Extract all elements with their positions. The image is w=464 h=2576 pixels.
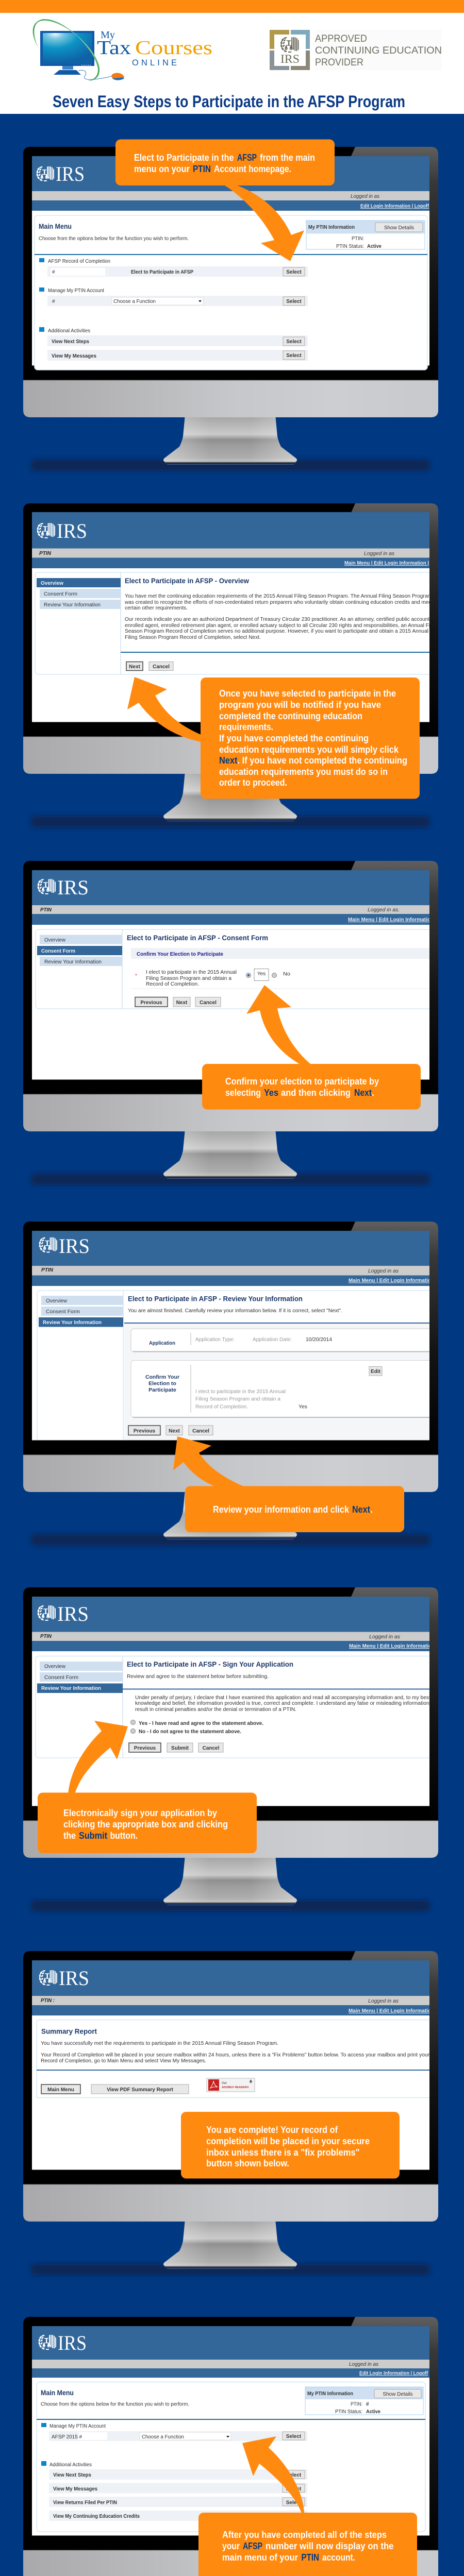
side navigation: Review Your Information	[43, 1320, 102, 1326]
form buttons: Cancel	[153, 664, 170, 670]
callout 1: Elect to Participate in the	[134, 152, 234, 163]
PTIN information box: Show Details	[384, 225, 414, 231]
callout 6: completion will be placed in your secure	[206, 2136, 370, 2146]
callout 3: Yes	[264, 1088, 278, 1098]
agreement options: No - I do not agree to the statement above.	[139, 1729, 241, 1735]
side navigation: Consent Form	[41, 948, 75, 954]
logo wordmark: ONLINE	[132, 58, 177, 67]
screen content	[32, 1960, 434, 2098]
callout 3: .	[372, 1088, 374, 1098]
logo: IRS approved continuing education provider	[270, 30, 442, 70]
IRS header bar	[32, 156, 429, 211]
IRS logo	[37, 879, 88, 894]
logged in: Logged in as	[349, 2361, 379, 2367]
logged in: Logged in as	[351, 193, 380, 199]
confirm election form: No	[283, 972, 290, 977]
manage PTIN section: Choose a Function	[113, 299, 156, 304]
page heading: Elect to Participate in AFSP - Overview	[125, 577, 249, 585]
form buttons	[128, 1426, 213, 1435]
arrow: callout to next button	[127, 677, 204, 742]
IRS logo	[36, 166, 84, 181]
IRS logo	[37, 1602, 89, 1625]
PTIN information box: Active	[367, 244, 382, 249]
callout 7: main menu of your	[222, 2552, 298, 2563]
arrow: callout to next button	[173, 1436, 247, 1488]
callout 7: number will now display on the	[266, 2541, 394, 2551]
callout 3: and then clicking	[281, 1088, 351, 1098]
callout 2: Once you have selected to participate in the	[219, 688, 396, 699]
account links: Edit Login Information | Logoff	[359, 2371, 428, 2376]
panel divider	[122, 1656, 123, 1758]
callout 4: .	[370, 1504, 373, 1515]
callout 2: If you have completed the continuing	[219, 733, 369, 743]
side navigation: Consent Form	[46, 1309, 80, 1315]
confirm election form: Yes	[257, 971, 266, 977]
perjury statement: Under penalty of perjury, I declare that I have examined this application and read all accompanying information and, to my best	[135, 1695, 430, 1701]
side navigation: Review Your Information	[44, 959, 102, 965]
perjury statement: result in criminal penalties and/or the denial or termination of a PTIN.	[135, 1707, 296, 1713]
confirm election card: Confirm Your	[145, 1374, 179, 1380]
IRS logo: IRS	[57, 1602, 89, 1625]
callout 2: order to proceed.	[219, 777, 287, 788]
logo: My Tax Courses Online	[33, 19, 212, 81]
callout 7: PTIN	[301, 2552, 319, 2563]
main panel	[36, 929, 448, 1009]
PTIN information box: Show Details	[383, 2392, 413, 2397]
callout 3: selecting	[225, 1088, 261, 1098]
instruction text: You are almost finished. Carefully review your information below. If it is correct, select "Next".	[128, 1308, 342, 1314]
manage PTIN section: Manage My PTIN Account	[48, 288, 104, 294]
logo monitor icon	[40, 31, 94, 75]
additional activities section: View My Continuing Education Credits	[53, 2514, 140, 2519]
arrow: callout to select	[223, 184, 304, 261]
main menu description: Choose from the options below for the function you wish to perform.	[39, 236, 189, 242]
perjury statement	[135, 1695, 441, 1713]
callout 2: . If you have not completed the continuing	[237, 755, 407, 766]
divider line	[123, 1689, 429, 1690]
form buttons: Previous	[140, 1000, 162, 1006]
divider line	[37, 2070, 429, 2071]
main panel	[35, 572, 448, 674]
orange top bar	[0, 0, 464, 13]
main menu heading: Main Menu	[41, 2388, 74, 2397]
callout 5: button.	[110, 1831, 138, 1841]
arrow: callout to yes option	[246, 985, 312, 1065]
screen content	[32, 870, 448, 1009]
logo mouse	[111, 73, 124, 80]
summary text	[41, 2041, 430, 2064]
callout 3: Confirm your election to participate by	[225, 1076, 379, 1087]
form buttons: Main Menu	[47, 2087, 74, 2093]
confirm election form: *	[135, 973, 137, 979]
form buttons: Next	[176, 1000, 188, 1006]
confirm election card: Participate	[148, 1387, 176, 1393]
side navigation: Consent Form	[44, 1675, 78, 1681]
PTIN information box: PTIN Status:	[336, 244, 364, 249]
form buttons: Cancel	[192, 1428, 209, 1434]
callout 7: AFSP	[243, 2541, 262, 2551]
panel divider	[122, 929, 123, 1009]
page heading: Elect to Participate in AFSP - Consent Form	[127, 934, 268, 942]
callout 2: requirements.	[219, 722, 273, 732]
confirm election card: Record of Completion.	[195, 1404, 248, 1410]
PTIN label: PTIN	[39, 550, 51, 556]
overview paragraph 1	[124, 594, 433, 611]
arrow: callout to agreement options	[68, 1721, 128, 1794]
summary text: Record of Completion, go to Main Menu and select View My Messages.	[41, 2058, 206, 2064]
main panel	[36, 1656, 448, 1758]
callout 1: PTIN	[193, 164, 211, 174]
account links: Main Menu | Edit Login Information |	[344, 561, 429, 566]
main panel	[35, 215, 427, 370]
overview paragraph 2: enrolled agent, enrolled retirement plan agent, or enrolled actuary subject to all Circular 230 rights and responsibilities, an Annual Filing	[125, 623, 438, 629]
logged in: Logged in as.	[368, 907, 400, 913]
overview paragraph 2: Season Program Record of Completion serves no additional purpose. However, if you want to participate and obtain a 2015 Annual	[125, 629, 428, 634]
summary text: Your Record of Completion will be placed in your secure mailbox within 24 hours, unless there is a "Fix Problems" button below. To access your mailbox and print your	[41, 2053, 430, 2058]
form buttons	[135, 997, 221, 1007]
callout 2: education requirements you will simply click	[219, 744, 399, 755]
AFSP record section: #	[52, 269, 55, 275]
provider text: CONTINUING EDUCATION	[315, 45, 442, 56]
IRS logo	[39, 1234, 90, 1258]
callout 5: clicking the appropriate box and clicking	[63, 1819, 228, 1829]
manage PTIN section: #	[52, 299, 55, 304]
step 6 monitor: summary report	[23, 1951, 438, 2275]
PTIN information box: PTIN:	[351, 2402, 362, 2407]
summary heading: Summary Report	[41, 2027, 97, 2035]
PTIN information box	[306, 221, 425, 249]
confirm election card: I elect to participate in the 2015 Annual	[195, 1389, 286, 1395]
monitor frame	[23, 147, 438, 471]
callout 5: Electronically sign your application by	[63, 1808, 217, 1818]
callout 5: Submit	[79, 1831, 107, 1841]
callout 5: the	[63, 1831, 76, 1841]
account links: Main Menu | Edit Login Information	[349, 1643, 435, 1649]
form buttons	[129, 1743, 223, 1752]
screen content	[32, 512, 448, 674]
callout 7: account.	[322, 2552, 355, 2563]
PTIN label: PTIN	[40, 1633, 52, 1639]
callout 2	[201, 677, 420, 799]
manage PTIN section: AFSP 2015 #	[52, 2434, 82, 2440]
form buttons: Next	[169, 1428, 180, 1434]
IRS logo: IRS	[59, 1234, 90, 1258]
overview paragraph 2: Our records indicate you are an authorized Department of Treasury Circular 230 practitioner. As an attorney, certified public accountant,	[125, 617, 438, 622]
confirm election card: Filing Season Program and obtain a	[195, 1396, 280, 1402]
screen content	[32, 1231, 440, 1440]
monitor frame	[23, 2317, 438, 2576]
form buttons: View PDF Summary Report	[107, 2087, 174, 2093]
Get Adobe Reader badge: ADOBE® READER®	[222, 2086, 249, 2089]
manage PTIN section	[41, 2423, 307, 2441]
IRS logo	[39, 1967, 89, 1990]
application card: Application	[149, 1340, 175, 1346]
additional activities section: Select	[286, 2500, 302, 2506]
application card: Application Type:	[195, 1337, 235, 1343]
confirm election form	[131, 948, 429, 989]
PTIN label: PTIN	[40, 907, 52, 913]
confirm election form: Record of Completion.	[146, 981, 199, 987]
overview paragraph 1: certain other requirements.	[125, 605, 188, 611]
main panel	[37, 2382, 425, 2532]
side navigation: Overview	[41, 581, 63, 586]
confirm election form: I elect to participate in the 2015 Annual	[146, 970, 237, 975]
logo wordmark: Courses	[135, 37, 212, 59]
step 7 monitor: main menu with AFSP number	[23, 2317, 438, 2576]
callout 2: education requirements you must do so in	[219, 767, 388, 777]
title: Seven Easy Steps to Participate in the AFSP Program	[53, 92, 405, 111]
confirm election card	[131, 1360, 440, 1418]
side navigation	[37, 935, 122, 966]
step 2 monitor: overview	[23, 503, 448, 827]
main panel outline	[37, 1291, 433, 1440]
form buttons: Next	[129, 664, 141, 670]
IRS header bar	[32, 1597, 429, 1651]
additional activities section: View Returns Filed Per PTIN	[53, 2500, 117, 2506]
IRS square frame	[270, 30, 310, 70]
IRS wordmark: IRS	[280, 53, 300, 65]
monitor frame	[23, 1951, 438, 2275]
form buttons	[126, 662, 173, 671]
side navigation: Overview	[44, 938, 66, 943]
logged in: Logged in as	[368, 1268, 399, 1274]
callout 3: Next	[354, 1088, 372, 1098]
confirm election card: Yes	[299, 1404, 307, 1410]
callout 1: menu on your	[134, 164, 190, 174]
application card: 10/20/2014	[306, 1337, 332, 1343]
PTIN label: PTIN	[41, 1267, 53, 1273]
IRS header bar	[32, 2326, 429, 2378]
callout 7: your	[222, 2541, 240, 2551]
callout 6: You are complete! Your record of	[206, 2125, 338, 2135]
logo cable	[78, 70, 112, 79]
side navigation: Consent Form	[44, 591, 77, 597]
monitor frame	[23, 503, 438, 827]
callout 2: program you will be notified if you have	[219, 700, 381, 710]
additional activities section: Select	[286, 2486, 302, 2492]
main menu description: Choose from the options below for the function you wish to perform.	[41, 2402, 189, 2407]
main menu heading: Main Menu	[39, 222, 72, 230]
form buttons: Previous	[134, 1428, 156, 1434]
additional activities section	[41, 2461, 307, 2521]
callout 1: AFSP	[237, 152, 257, 163]
callout 4	[185, 1486, 404, 1532]
side navigation	[37, 578, 121, 609]
confirm election form: Confirm Your Election to Participate	[137, 951, 223, 957]
screen content	[32, 156, 429, 370]
white header band	[0, 0, 464, 114]
divider line	[35, 254, 427, 255]
overview paragraph 2: Filing Season Program Record of Completion, select Next.	[125, 635, 261, 640]
monitor frame	[23, 1222, 438, 1546]
IRS header bar	[32, 870, 429, 925]
overview paragraph 2	[125, 617, 438, 640]
callout 1: from the main	[260, 152, 315, 163]
panel divider	[120, 572, 121, 674]
callout 3	[202, 1064, 421, 1110]
side navigation: Review Your Information	[44, 602, 101, 608]
application card: Application Date:	[253, 1337, 292, 1343]
IRS logo	[37, 522, 86, 538]
provider text	[315, 33, 442, 68]
manage PTIN section: Choose a Function	[142, 2434, 184, 2440]
PTIN information box	[305, 2387, 423, 2415]
PTIN information box: My PTIN Information	[307, 2391, 353, 2397]
form buttons: Cancel	[203, 1745, 220, 1751]
step 1 monitor: main menu	[23, 147, 438, 471]
additional activities section: Select	[286, 339, 302, 345]
callout 2: Next	[219, 755, 238, 766]
PTIN information box: Active	[366, 2409, 380, 2415]
callout 4: Next	[352, 1504, 370, 1515]
PTIN label: PTIN :	[41, 1997, 55, 2004]
additional activities section: Additional Activities	[49, 2462, 92, 2468]
additional activities section: Select	[286, 353, 302, 359]
perjury statement: knowledge and belief, the information provided is true, correct and complete. I understand any false or misleading information may	[135, 1701, 441, 1706]
side navigation: Review Your Information	[41, 1686, 101, 1691]
monitor frame	[23, 861, 438, 1185]
PTIN information box: PTIN:	[352, 236, 364, 242]
side navigation: Overview	[44, 1664, 66, 1669]
Get Adobe Reader badge: Get	[222, 2082, 227, 2085]
agreement options	[131, 1720, 263, 1735]
logged in: Logged in as	[368, 1998, 399, 2004]
logged in: Logged in as	[364, 550, 395, 556]
screen content	[32, 2326, 429, 2532]
logo swoosh	[33, 19, 100, 81]
form buttons: Submit	[171, 1745, 189, 1751]
IRS logo	[38, 2331, 87, 2354]
callout 1	[115, 139, 335, 185]
additional activities section	[39, 327, 308, 361]
logo wordmark	[97, 29, 212, 67]
IRS logo: IRS	[57, 519, 87, 543]
provider background	[315, 30, 442, 70]
additional activities section: Additional Activities	[48, 328, 90, 334]
arrow: callout to AFSP number row	[242, 2436, 304, 2514]
side navigation	[37, 1662, 123, 1693]
callout 4: Review your information and click	[213, 1504, 350, 1515]
logo wordmark: My	[101, 29, 115, 41]
form buttons: Cancel	[200, 1000, 217, 1006]
additional activities section: View My Messages	[52, 353, 96, 359]
review background	[124, 1324, 429, 1440]
callout 1: Account homepage.	[214, 164, 291, 174]
agreement options: Yes - I have read and agree to the statement above.	[139, 1721, 263, 1726]
monitor frame	[23, 1587, 438, 1911]
callout 2: completed the continuing education	[219, 711, 362, 721]
provider text: APPROVED	[315, 33, 367, 44]
additional activities section: View My Messages	[53, 2486, 97, 2492]
account links: Main Menu | Edit Login Information	[348, 917, 434, 923]
additional activities section: Select	[286, 2472, 302, 2478]
side navigation: Overview	[46, 1298, 68, 1304]
side navigation	[39, 1296, 123, 1327]
AFSP record section: Select	[286, 269, 302, 275]
manage PTIN section: Manage My PTIN Account	[49, 2424, 106, 2429]
manage PTIN section	[39, 287, 308, 306]
step 4 monitor: review information	[23, 1222, 440, 1546]
IRS header bar	[32, 1231, 429, 1286]
callout 7: After you have completed all of the steps	[222, 2530, 387, 2540]
account links: Edit Login Information | Logoff	[360, 204, 429, 209]
step 3 monitor: consent form	[23, 861, 448, 1185]
page heading: Elect to Participate in AFSP - Sign Your Application	[127, 1660, 293, 1668]
IRS logo: IRS	[59, 1967, 89, 1990]
confirm election form: Filing Season Program and obtain a	[146, 976, 231, 981]
PTIN information box: #	[366, 2402, 369, 2407]
IRS logo: IRS	[58, 2331, 87, 2354]
overview paragraph 1: You have met the continuing education requirements of the 2015 Annual Filing Season Program. The Annual Filing Season Program	[125, 594, 432, 599]
callout 7	[198, 2513, 417, 2576]
IRS header bar	[32, 1960, 429, 2015]
overview paragraph 1: was created to recognize the efforts of non-credentialed return preparers who voluntarily obtain continuing education credits and meet	[124, 600, 433, 605]
form buttons	[41, 2084, 189, 2094]
summary text: You have successfully met the requirements to participate in the 2015 Annual Filing Season Program.	[41, 2041, 278, 2046]
callout 5	[38, 1793, 257, 1853]
AFSP record section: Elect to Participate in AFSP	[131, 269, 193, 275]
main panel	[37, 2020, 433, 2098]
PTIN information box: My PTIN Information	[308, 225, 355, 230]
confirm election card: Edit	[371, 1369, 381, 1375]
form buttons: Previous	[134, 1745, 156, 1751]
account links: Main Menu | Edit Login Information	[349, 2008, 434, 2014]
divider line	[124, 1323, 429, 1324]
IRS header bar	[32, 512, 429, 568]
step 5 monitor: sign application	[23, 1587, 448, 1911]
instruction text: Review and agree to the statement below before submitting.	[127, 1674, 269, 1680]
PTIN information box: PTIN Status:	[335, 2409, 362, 2415]
AFSP record section: AFSP Record of Completion	[48, 259, 110, 264]
manage PTIN section: Select	[286, 299, 302, 304]
screen content	[32, 1597, 448, 1758]
divider line	[37, 2419, 425, 2420]
IRS logo: IRS	[56, 162, 85, 185]
page heading: Elect to Participate in AFSP - Review Your Information	[128, 1294, 303, 1302]
account links: Main Menu | Edit Login Information	[349, 1278, 434, 1284]
provider text: PROVIDER	[315, 57, 363, 68]
callout 6	[181, 2112, 400, 2178]
Get Adobe Reader badge	[207, 2078, 255, 2092]
logged in: Logged in as	[369, 1634, 401, 1640]
logo wordmark: Tax	[97, 37, 131, 59]
callout 6: button shown below.	[206, 2158, 289, 2168]
manage PTIN section: Select	[286, 2434, 302, 2439]
divider line	[121, 652, 429, 653]
AFSP record section	[39, 258, 308, 277]
IRS emblem	[280, 37, 299, 53]
callout 6: inbox unless there is a "fix problems"	[206, 2147, 360, 2158]
application card	[131, 1329, 440, 1352]
IRS logo: IRS	[57, 876, 89, 899]
additional activities section: View Next Steps	[53, 2472, 91, 2478]
additional activities section: View Next Steps	[52, 339, 89, 345]
confirm election card: Election to	[148, 1381, 176, 1387]
